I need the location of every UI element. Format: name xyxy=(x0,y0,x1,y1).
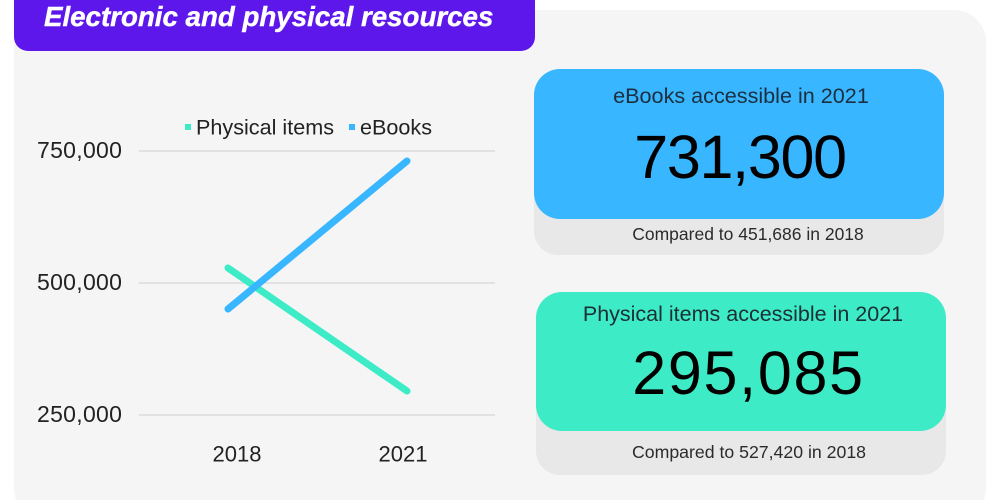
y axis labels xyxy=(37,137,122,427)
ebooks line xyxy=(228,161,407,309)
line chart xyxy=(37,114,495,466)
title banner xyxy=(14,0,535,51)
card: ebooks xyxy=(534,69,944,255)
ebooks main block xyxy=(534,69,944,219)
legend xyxy=(185,114,432,140)
legend: Physical items xyxy=(196,114,334,140)
x axis labels: 2021 xyxy=(379,442,427,466)
x axis labels xyxy=(213,442,427,466)
y axis labels: 750,000 xyxy=(37,137,122,163)
title: Electronic and physical resources xyxy=(44,1,493,32)
physical items line xyxy=(228,268,407,391)
x axis labels: 2018 xyxy=(213,442,261,466)
ebooks value: 731,300 xyxy=(634,123,846,191)
y axis labels: 500,000 xyxy=(37,269,122,295)
card: physical items xyxy=(536,292,946,475)
legend: eBooks xyxy=(360,114,432,140)
y axis labels: 250,000 xyxy=(37,401,122,427)
ebooks comparison footer xyxy=(534,169,944,255)
physical heading: Physical items accessible in 2021 xyxy=(583,302,903,326)
physical main block xyxy=(536,292,946,431)
physical comparison footer: Compared to 527,420 in 2018 xyxy=(632,442,866,462)
ebooks comparison footer: Compared to 451,686 in 2018 xyxy=(632,224,864,244)
physical comparison footer xyxy=(536,392,946,475)
ebooks heading: eBooks accessible in 2021 xyxy=(613,83,869,108)
physical value: 295,085 xyxy=(632,339,865,407)
